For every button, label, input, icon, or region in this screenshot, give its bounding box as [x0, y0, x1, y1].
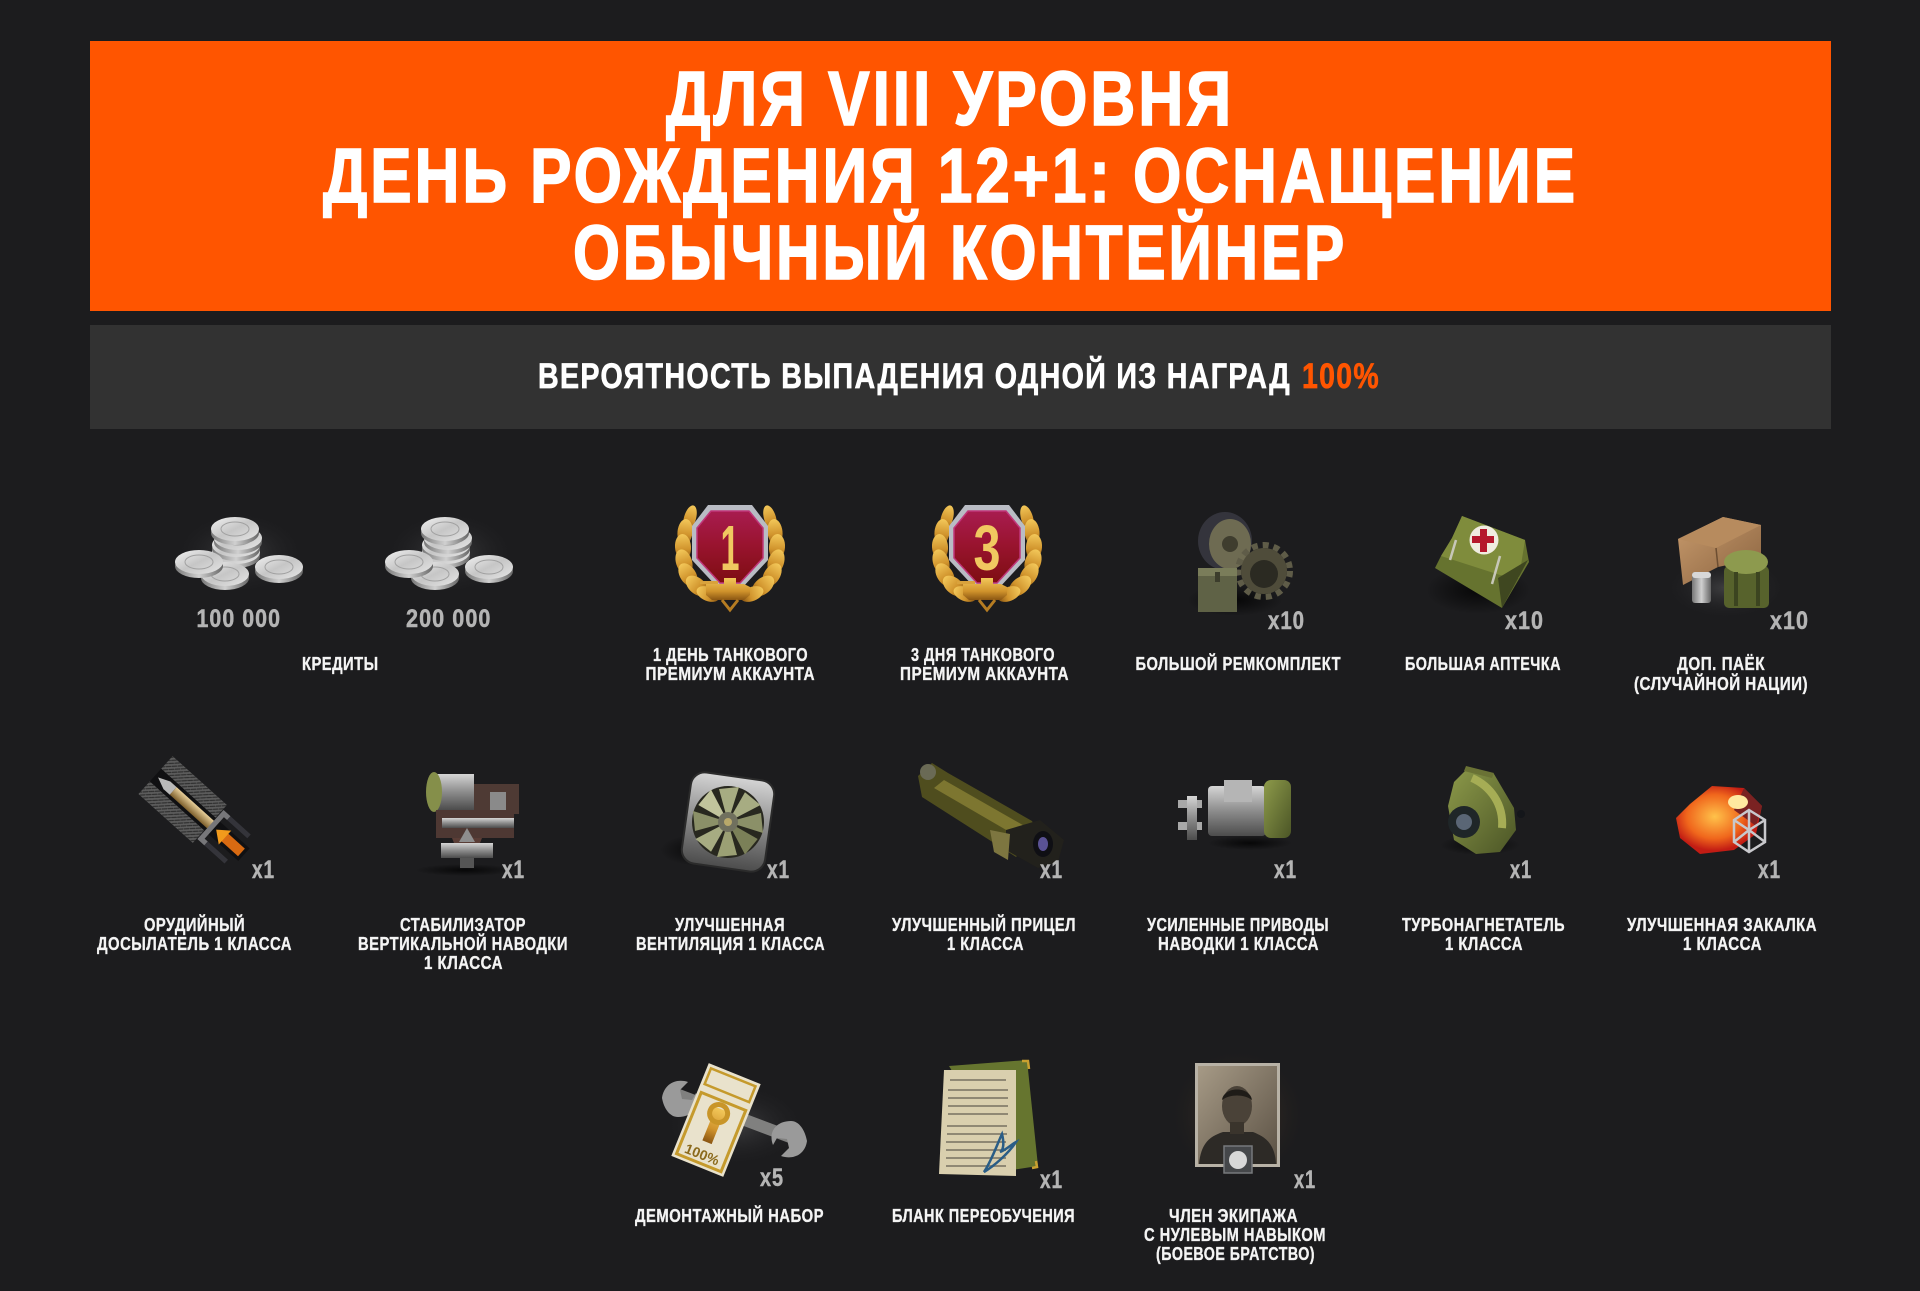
label: ВЕНТИЛЯЦИЯ 1 КЛАССА: [636, 933, 825, 954]
credits group: [174, 511, 516, 674]
amount: 100 000: 100 000: [196, 605, 281, 633]
reward: 3 days premium: [900, 504, 1069, 684]
label: [636, 914, 825, 954]
label: (БОЕВОЕ БРАТСТВО): [1156, 1243, 1315, 1264]
label: ДЕМОНТАЖНЫЙ НАБОР: [635, 1205, 824, 1226]
quantity: x1: [767, 856, 790, 884]
label: ТУРБОНАГНЕТАТЕЛЬ: [1402, 914, 1565, 935]
label: 1 КЛАССА: [1445, 933, 1523, 954]
label: С НУЛЕВЫМ НАВЫКОМ: [1144, 1224, 1326, 1245]
quantity: x5: [760, 1164, 784, 1192]
title banner: ДЛЯ VIII УРОВНЯ: [666, 56, 1234, 142]
icon: medal 3: [929, 504, 1045, 610]
quantity: x1: [252, 856, 275, 884]
label: ВЕРТИКАЛЬНОЙ НАВОДКИ: [358, 933, 568, 954]
reward: vertical stabilizer: [358, 772, 568, 973]
label: ДОСЫЛАТЕЛЬ 1 КЛАССА: [97, 933, 292, 954]
quantity: x1: [1510, 856, 1532, 884]
probability bar: ВЕРОЯТНОСТЬ ВЫПАДЕНИЯ ОДНОЙ ИЗ НАГРАД: [538, 356, 1291, 396]
icon: first aid kit: [1426, 516, 1530, 614]
label: [646, 644, 815, 684]
reward: extra rations: [1634, 517, 1809, 694]
icon: fan: [660, 771, 776, 873]
icon: retraining form: [939, 1060, 1038, 1176]
label: БЛАНК ПЕРЕОБУЧЕНИЯ: [892, 1205, 1075, 1226]
quantity: x1: [1274, 856, 1297, 884]
quantity: x1: [1040, 856, 1063, 884]
amount: 200 000: 200 000: [406, 605, 492, 633]
icon: hardening: [1676, 786, 1765, 854]
label: ДОП. ПАЁК: [1677, 653, 1765, 674]
label: ЧЛЕН ЭКИПАЖА: [1169, 1205, 1298, 1226]
title banner: ДЕНЬ РОЖДЕНИЯ 12+1: ОСНАЩЕНИЕ: [323, 133, 1578, 219]
reward: improved ventilation: [636, 771, 825, 954]
label: [892, 914, 1076, 954]
label: [1627, 914, 1817, 954]
quantity: x1: [1758, 856, 1781, 884]
reward: dismantling kit: [635, 1063, 824, 1226]
quantity: x1: [502, 856, 525, 884]
label: [1402, 914, 1565, 954]
probability bar: [90, 325, 1831, 429]
label: 1 КЛАССА: [947, 933, 1024, 954]
reward: 1 day premium: [646, 504, 815, 684]
label: [97, 914, 292, 954]
label: ОРУДИЙНЫЙ: [144, 914, 245, 935]
label: УЛУЧШЕННАЯ: [675, 914, 785, 935]
probability bar: 100%: [1302, 357, 1380, 396]
reward: turbocharger: [1402, 766, 1565, 954]
icon: gun rammer: [138, 756, 261, 874]
reward: large repair kit: [1136, 512, 1341, 674]
icon: crew photo: [1168, 1047, 1308, 1183]
label: [358, 914, 568, 973]
icon: coins 100 000: [174, 511, 306, 595]
icon: turbocharger: [1440, 766, 1525, 855]
label: ПРЕМИУМ АККАУНТА: [646, 663, 815, 684]
label: УЛУЧШЕННАЯ ЗАКАЛКА: [1627, 914, 1817, 935]
label: БОЛЬШАЯ АПТЕЧКА: [1405, 653, 1561, 674]
label: НАВОДКИ 1 КЛАССА: [1158, 933, 1319, 954]
quantity: x10: [1505, 607, 1544, 635]
quantity: x1: [1294, 1166, 1316, 1194]
reward: enhanced gun laying drive: [1147, 780, 1329, 954]
reward: improved sight: [892, 763, 1076, 954]
label: [1634, 653, 1808, 694]
label: УСИЛЕННЫЕ ПРИВОДЫ: [1147, 914, 1329, 935]
label: credits: КРЕДИТЫ: [302, 653, 378, 674]
label: СТАБИЛИЗАТОР: [400, 914, 526, 935]
icon: medal 1: 1: [720, 512, 740, 584]
label: [900, 644, 1069, 684]
label: [1144, 1205, 1326, 1264]
icon: stabilizer: [415, 772, 519, 876]
icon: gun sight: [918, 763, 1064, 868]
reward: improved hardening: [1627, 786, 1817, 954]
title banner: ОБЫЧНЫЙ КОНТЕЙНЕР: [573, 208, 1347, 296]
icon: coins 200 000: [384, 511, 516, 595]
label: ПРЕМИУМ АККАУНТА: [900, 663, 1069, 684]
icon: medal 3: 3: [974, 512, 1000, 584]
label: 1 КЛАССА: [1683, 933, 1762, 954]
quantity: x10: [1268, 607, 1305, 635]
label: 1 ДЕНЬ ТАНКОВОГО: [653, 644, 808, 665]
quantity: x10: [1770, 607, 1809, 635]
label: 3 ДНЯ ТАНКОВОГО: [911, 644, 1055, 665]
label: 1 КЛАССА: [424, 952, 503, 973]
reward: gun rammer: [97, 756, 292, 954]
icon: wrench and ticket: 100%: [683, 1140, 722, 1169]
icon: drive: [1178, 780, 1292, 850]
icon: repair kit: [1187, 512, 1290, 616]
label: БОЛЬШОЙ РЕМКОМПЛЕКТ: [1136, 653, 1341, 674]
label: УЛУЧШЕННЫЙ ПРИЦЕЛ: [892, 914, 1076, 935]
label: (СЛУЧАЙНОЙ НАЦИИ): [1634, 673, 1808, 694]
icon: rations: [1664, 517, 1788, 620]
title banner: [90, 41, 1831, 311]
reward: crew member: [1144, 1047, 1326, 1264]
label: [1147, 914, 1329, 954]
icon: medal 1: [672, 504, 788, 610]
reward: retraining order: [892, 1060, 1075, 1226]
icon: wrench and ticket: [662, 1063, 807, 1177]
reward: large first aid kit: [1405, 516, 1561, 674]
quantity: x1: [1040, 1166, 1063, 1194]
